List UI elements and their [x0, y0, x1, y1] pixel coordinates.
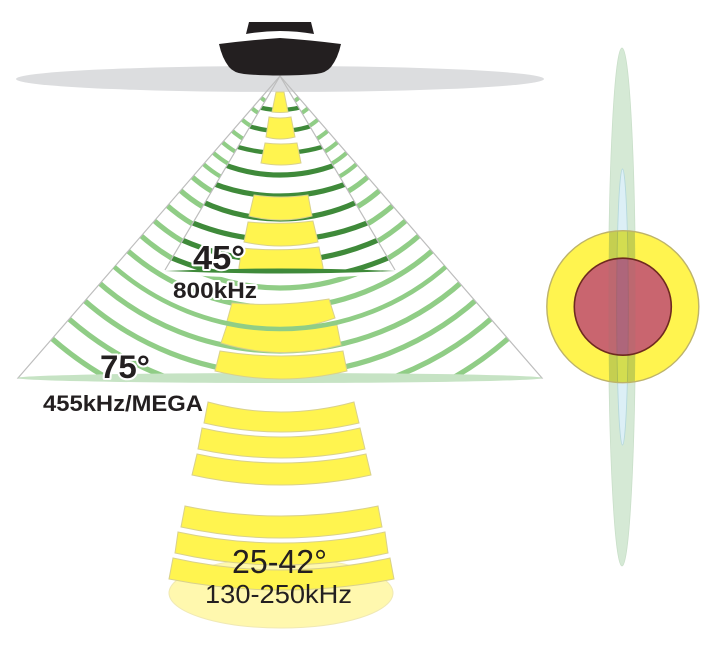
green wide beam ellipse [608, 48, 636, 566]
label: 130-250kHz: 130-250kHz [205, 579, 352, 609]
yellow CHIRP beam blocks, upper [215, 92, 347, 379]
label: 75 degrees: 75° [100, 349, 150, 385]
label: 800kHz: 800kHz [173, 278, 257, 303]
yellow CHIRP beam blocks, bottom [169, 506, 394, 590]
inner 45 degree cone background [164, 76, 396, 278]
light green 455kHz sonar arcs [51, 96, 509, 374]
yellow CHIRP circle [547, 231, 699, 383]
label: 45 degrees: 45° [193, 239, 245, 276]
light green arc crossing the yellow blocks [113, 265, 447, 332]
inner 45 degree cone outline [165, 76, 395, 270]
beam overlap on yellow circle [608, 231, 636, 382]
beam overlap on red circle [608, 259, 636, 354]
blue narrow beam ellipse [617, 169, 628, 445]
label: 455kHz/MEGA: 455kHz/MEGA [43, 391, 203, 416]
yellow CHIRP beam blocks, lower [192, 402, 371, 485]
inner cone base line [165, 268, 395, 274]
yellow circle outline [547, 231, 699, 383]
outer cone base line [18, 373, 542, 383]
red sonar circle [574, 258, 671, 355]
dark green 800kHz sonar arcs [171, 106, 389, 270]
label: 25-42 degrees: 25-42° [232, 543, 327, 580]
side view of beam footprints [547, 48, 699, 566]
red circle outline [574, 258, 671, 355]
icon: boat [219, 22, 341, 76]
pale yellow 25-42 degree footprint ellipse [169, 558, 393, 628]
water surface ellipse [16, 66, 544, 92]
outer 75 degree cone outline [18, 76, 542, 378]
